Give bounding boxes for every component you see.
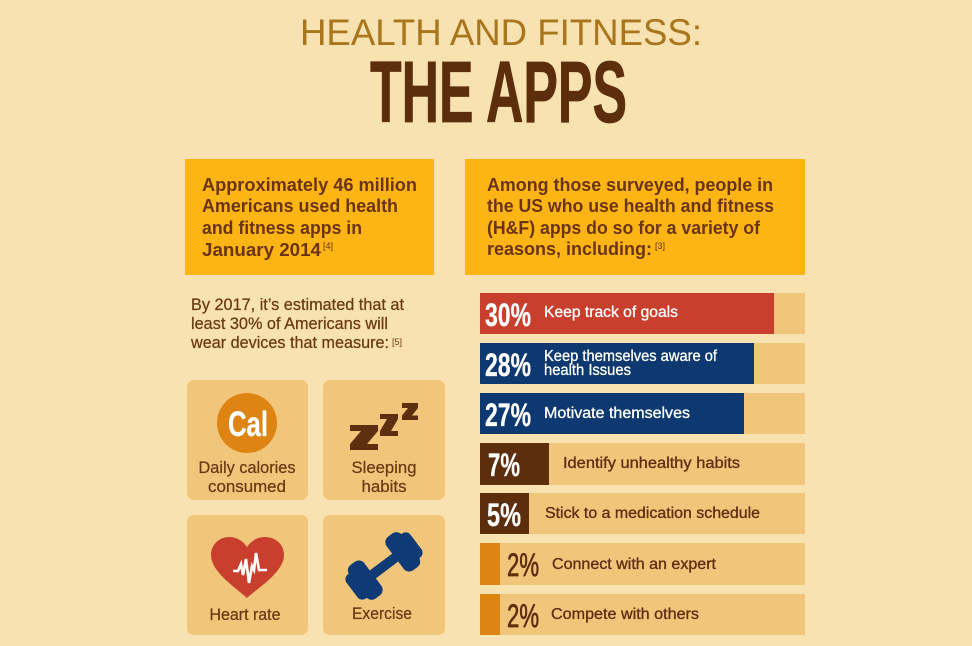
- bar: 5% medication schedule: Stick to a medication schedule: [545, 505, 760, 522]
- panel: 46 million callout: and fitness apps in: [202, 218, 362, 238]
- bar: 7% unhealthy habits: Identify unhealthy habits: [563, 455, 740, 472]
- icon: calories circle: Cal: [228, 405, 268, 444]
- icon: dumbbell: [339, 525, 429, 607]
- panel: 46 million callout: [185, 159, 434, 275]
- bar: 28% keep aware: 28%: [485, 347, 531, 383]
- panel: reasons callout: [465, 159, 805, 275]
- bar: 30% keep track of goals: 30%: [485, 297, 531, 333]
- bar: 2% connect with expert: [480, 543, 805, 585]
- icon: zzz: [350, 403, 418, 450]
- bar: 2% compete with others: [480, 594, 805, 635]
- title line 2: THE APPS: [370, 44, 627, 141]
- panel: reasons callout: Among those surveyed, people in: [487, 175, 773, 195]
- bar: 7% unhealthy habits: [480, 443, 805, 485]
- label: daily calories: [198, 459, 296, 496]
- bar: 5% medication schedule: 5%: [487, 497, 521, 533]
- bar: 30% keep track of goals: [480, 293, 805, 334]
- text block: 2017 estimate: least 30% of Americans will: [191, 315, 388, 333]
- bar: 30% keep track of goals: Keep track of goals: [544, 304, 678, 321]
- label: heart rate: Heart rate: [210, 606, 280, 624]
- panel: daily calories tile: [187, 380, 308, 500]
- text block: 2017 estimate: [5]: [392, 337, 402, 347]
- panel: 46 million callout: Approximately 46 million: [202, 175, 417, 195]
- panel: reasons callout: [3]: [655, 241, 665, 251]
- text block: 2017 estimate: By 2017, it’s estimated that at: [191, 296, 404, 314]
- panel: reasons callout: reasons, including:: [487, 239, 652, 259]
- title line 1: HEALTH AND FITNESS:: [300, 12, 702, 53]
- bar: 2% compete with others: 2%: [507, 598, 539, 634]
- icon: heart with pulse: [211, 537, 284, 598]
- bar: 28% keep aware: [480, 343, 805, 384]
- panel: sleeping habits tile: [323, 380, 445, 500]
- label: daily calories: consumed: [208, 478, 286, 496]
- bar: 27% motivate: [480, 393, 805, 434]
- panel: exercise tile: [323, 515, 445, 635]
- bar chart: reasons for using apps: [480, 293, 805, 635]
- panel: heart rate tile: [187, 515, 308, 635]
- bar: 28% keep aware: health Issues: [544, 362, 631, 379]
- panel: reasons callout: (H&F) apps do so for a variety of: [487, 218, 761, 238]
- label: sleeping habits: habits: [362, 478, 406, 496]
- panel: 46 million callout: [4]: [323, 241, 333, 251]
- text block: 2017 estimate: [190, 296, 404, 352]
- panel: reasons callout: the US who use health and fitness: [487, 196, 774, 216]
- panel: 46 million callout: Americans used health: [202, 196, 398, 216]
- bar: 27% motivate: 27%: [485, 397, 531, 433]
- bar: 2% connect with expert: 2%: [507, 547, 539, 583]
- bar: 2% compete with others: Compete with others: [551, 606, 699, 623]
- bar: 5% medication schedule: [480, 493, 805, 534]
- bar: 7% unhealthy habits: 7%: [488, 447, 520, 483]
- label: daily calories: Daily calories: [198, 459, 296, 477]
- bar: 27% motivate: Motivate themselves: [544, 405, 690, 422]
- bar: 2% connect with expert: Connect with an expert: [552, 556, 717, 573]
- panel: 46 million callout: January 2014: [202, 240, 321, 260]
- title: [300, 12, 702, 141]
- label: sleeping habits: Sleeping: [352, 459, 416, 477]
- label: sleeping habits: [352, 459, 416, 496]
- bar: 28% keep aware: Keep themselves aware of: [544, 348, 718, 365]
- label: exercise: Exercise: [352, 605, 412, 623]
- text block: 2017 estimate: wear devices that measure:: [190, 334, 389, 352]
